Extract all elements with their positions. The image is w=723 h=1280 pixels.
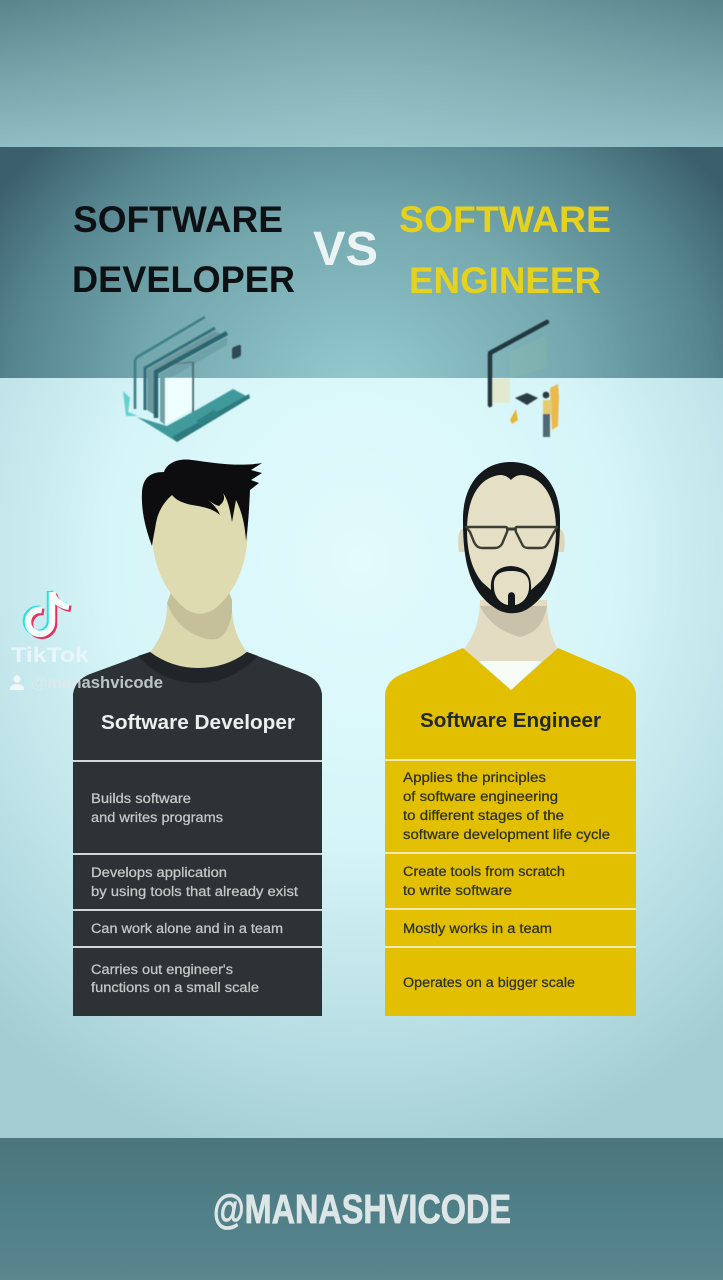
title: software engineer (399, 198, 611, 301)
row text: Develops application (91, 865, 227, 880)
bottom band (0, 1138, 723, 1280)
figure: software engineer (458, 462, 565, 662)
glasses (466, 527, 557, 548)
icon: tiktok note (26, 591, 71, 636)
neck shadow (480, 606, 547, 637)
title: software developer: SOFTWARE (73, 198, 283, 240)
icon: user (10, 675, 24, 690)
row text: by using tools that already exist (91, 884, 298, 899)
card: software engineer (385, 648, 636, 1016)
row dividers (73, 760, 322, 948)
card heading: Software Engineer (420, 710, 601, 732)
face (466, 465, 558, 612)
collar (138, 652, 258, 683)
row text (403, 770, 610, 990)
row text: to different stages of the (403, 808, 564, 823)
row text: Builds software (91, 791, 191, 806)
face (152, 480, 248, 614)
row dividers (385, 759, 636, 948)
row text: Applies the principles (403, 770, 546, 785)
shirt and panel (385, 648, 636, 1016)
chin skin (494, 571, 529, 605)
page background (0, 378, 723, 1138)
tiktok wordmark: TikTok (11, 644, 89, 667)
icon: developer isometric screens (123, 317, 250, 442)
icon: engineer screen and figure (490, 322, 559, 437)
row text: to write software (403, 883, 512, 898)
card heading: Software Developer (101, 712, 295, 734)
ears (458, 528, 565, 552)
title: software engineer: ENGINEER (409, 259, 601, 301)
card: software developer (73, 652, 322, 1016)
top background band (0, 0, 723, 147)
tiktok handle: @manashvicode (31, 673, 163, 692)
row text: and writes programs (91, 810, 223, 825)
hair and beard (463, 462, 560, 613)
neck shadow (167, 590, 232, 639)
header panel (0, 147, 723, 378)
row text: software development life cycle (403, 827, 610, 842)
undershirt (480, 661, 541, 690)
title: software developer: DEVELOPER (72, 258, 295, 300)
row text: Operates on a bigger scale (403, 975, 575, 990)
title: software developer (72, 198, 295, 300)
figure: software developer (142, 460, 262, 680)
footer handle: @MANASHVICODE (213, 1186, 511, 1232)
row text: Can work alone and in a team (91, 921, 283, 936)
row text: Carries out engineer's (91, 962, 233, 977)
row text: functions on a small scale (91, 980, 259, 995)
title: vs: VS (313, 223, 378, 276)
row text: of software engineering (403, 789, 558, 804)
row text (91, 791, 298, 995)
neck (150, 590, 247, 680)
neck (463, 600, 558, 662)
row text: Create tools from scratch (403, 864, 565, 879)
row text: Mostly works in a team (403, 921, 552, 936)
shirt and panel (73, 652, 322, 1016)
hair (142, 460, 262, 546)
title: software engineer: SOFTWARE (399, 198, 611, 240)
tiktok watermark (10, 591, 163, 692)
